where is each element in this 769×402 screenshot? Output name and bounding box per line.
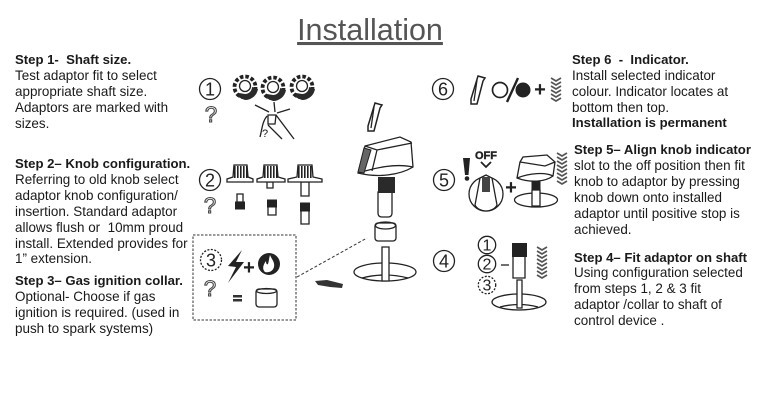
text block: step 4 fit adaptor on shaft: Step 4– Fit adaptor on shaft bbox=[574, 250, 748, 265]
panel: step 3 gas ignition collar: ? bbox=[204, 276, 216, 301]
text block: step 6 indicator: Install selected indicator bbox=[572, 68, 716, 83]
text block: step 2 knob configuration: Referring to old knob select bbox=[15, 172, 179, 187]
diagram: step 6 indicator colour bbox=[432, 76, 561, 104]
text block: step 2 knob configuration: install. Extended provides for bbox=[15, 236, 188, 251]
text block: step 6 indicator bbox=[572, 52, 728, 130]
diagram: step 4 fit adaptor: 3 bbox=[483, 278, 492, 294]
text block: step 4 fit adaptor on shaft: from steps 1, 2 & 3 fit bbox=[574, 281, 701, 296]
text block: step 1 shaft size: sizes. bbox=[15, 116, 49, 131]
text block: step 2 knob configuration: 1” extension. bbox=[15, 251, 92, 266]
diagram: step 5 align knob bbox=[434, 150, 567, 211]
diagram: step 2 knob configurations: 2 bbox=[205, 170, 215, 190]
text block: step 5 align knob indicator: knob to adaptor by pressing bbox=[574, 174, 740, 189]
panel: step 3 gas ignition collar: + bbox=[243, 257, 255, 279]
text block: step 3 gas ignition collar: Optional- Choose if gas bbox=[15, 289, 156, 304]
text block: step 4 fit adaptor on shaft: adaptor /collar to shaft of bbox=[574, 297, 722, 312]
text block: step 5 align knob indicator bbox=[574, 142, 751, 237]
panel: step 3 gas ignition collar bbox=[193, 235, 296, 320]
text block: step 4 fit adaptor on shaft: Using configuration selected bbox=[574, 265, 743, 280]
text block: step 5 align knob indicator: Step 5– Align knob indicator bbox=[574, 142, 751, 157]
text block: step 6 indicator: bottom then top. bbox=[572, 100, 669, 115]
text block: step 2 knob configuration: adaptor knob configuration/ bbox=[15, 188, 178, 203]
text block: step 5 align knob indicator: knob down onto installed bbox=[574, 190, 722, 205]
diagram: step 1 choose shaft size: ? bbox=[205, 102, 217, 127]
diagram: step 2 knob configurations: ? bbox=[204, 193, 216, 218]
diagram: step 5 align knob: OFF bbox=[475, 150, 497, 162]
diagram: step 4 fit adaptor: 4 bbox=[439, 252, 449, 272]
text block: step 1 shaft size: appropriate shaft size. bbox=[15, 84, 147, 99]
diagram: step 6 indicator colour: 6 bbox=[438, 80, 448, 100]
diagram: step 4 fit adaptor: 1 bbox=[483, 238, 492, 254]
diagram: step 1 choose shaft size bbox=[200, 76, 315, 140]
diagram: step 4 fit adaptor bbox=[434, 236, 547, 310]
diagram: step 6 indicator colour: + bbox=[534, 79, 546, 101]
diagram: step 5 align knob: + bbox=[505, 177, 517, 199]
text block: step 5 align knob indicator: slot to the off position then fit bbox=[574, 158, 745, 173]
diagram: step 2 knob configurations bbox=[200, 165, 322, 224]
text block: step 6 indicator: colour. Indicator locates at bbox=[572, 84, 728, 99]
diagram: step 4 fit adaptor: 2 bbox=[483, 256, 492, 274]
text block: step 5 align knob indicator: achieved. bbox=[574, 222, 632, 237]
diagram: central exploded knob assembly bbox=[354, 103, 416, 281]
text block: step 1 shaft size: Test adaptor fit to select bbox=[15, 68, 157, 83]
dashed leader line bbox=[297, 238, 367, 277]
diagram: step 1 choose shaft size: ? bbox=[262, 128, 268, 140]
text block: step 4 fit adaptor on shaft: control device . bbox=[574, 313, 664, 328]
diagram: step 1 choose shaft size: 1 bbox=[205, 80, 215, 100]
text block: step 4 fit adaptor on shaft bbox=[574, 250, 748, 328]
text block: step 3 gas ignition collar: push to spark systems) bbox=[15, 321, 153, 336]
text block: step 2 knob configuration: Step 2– Knob configuration. bbox=[15, 156, 190, 171]
title: Installation bbox=[297, 13, 443, 47]
icon: small parts bbox=[315, 280, 343, 288]
text block: step 3 gas ignition collar: ignition is required. (used in bbox=[15, 305, 179, 320]
panel: step 3 gas ignition collar: 3 bbox=[206, 250, 216, 270]
diagram: step 5 align knob: 5 bbox=[439, 170, 449, 190]
text block: step 6 indicator: Installation is permanent bbox=[572, 115, 727, 130]
text block: step 1 shaft size: Step 1- Shaft size. bbox=[15, 52, 131, 67]
text block: step 6 indicator: Step 6 - Indicator. bbox=[572, 52, 689, 67]
text block: step 1 shaft size bbox=[15, 52, 168, 131]
text block: step 1 shaft size: Adaptors are marked with bbox=[15, 100, 168, 115]
text block: step 3 gas ignition collar: Step 3– Gas ignition collar. bbox=[15, 273, 183, 288]
text block: step 2 knob configuration: allows flush or 10mm proud bbox=[15, 220, 183, 235]
text block: step 5 align knob indicator: adaptor until positive stop is bbox=[574, 206, 740, 221]
text block: step 3 gas ignition collar bbox=[15, 273, 183, 336]
text block: step 2 knob configuration: insertion. Standard adaptor bbox=[15, 204, 178, 219]
text block: step 2 knob configuration bbox=[15, 156, 190, 266]
